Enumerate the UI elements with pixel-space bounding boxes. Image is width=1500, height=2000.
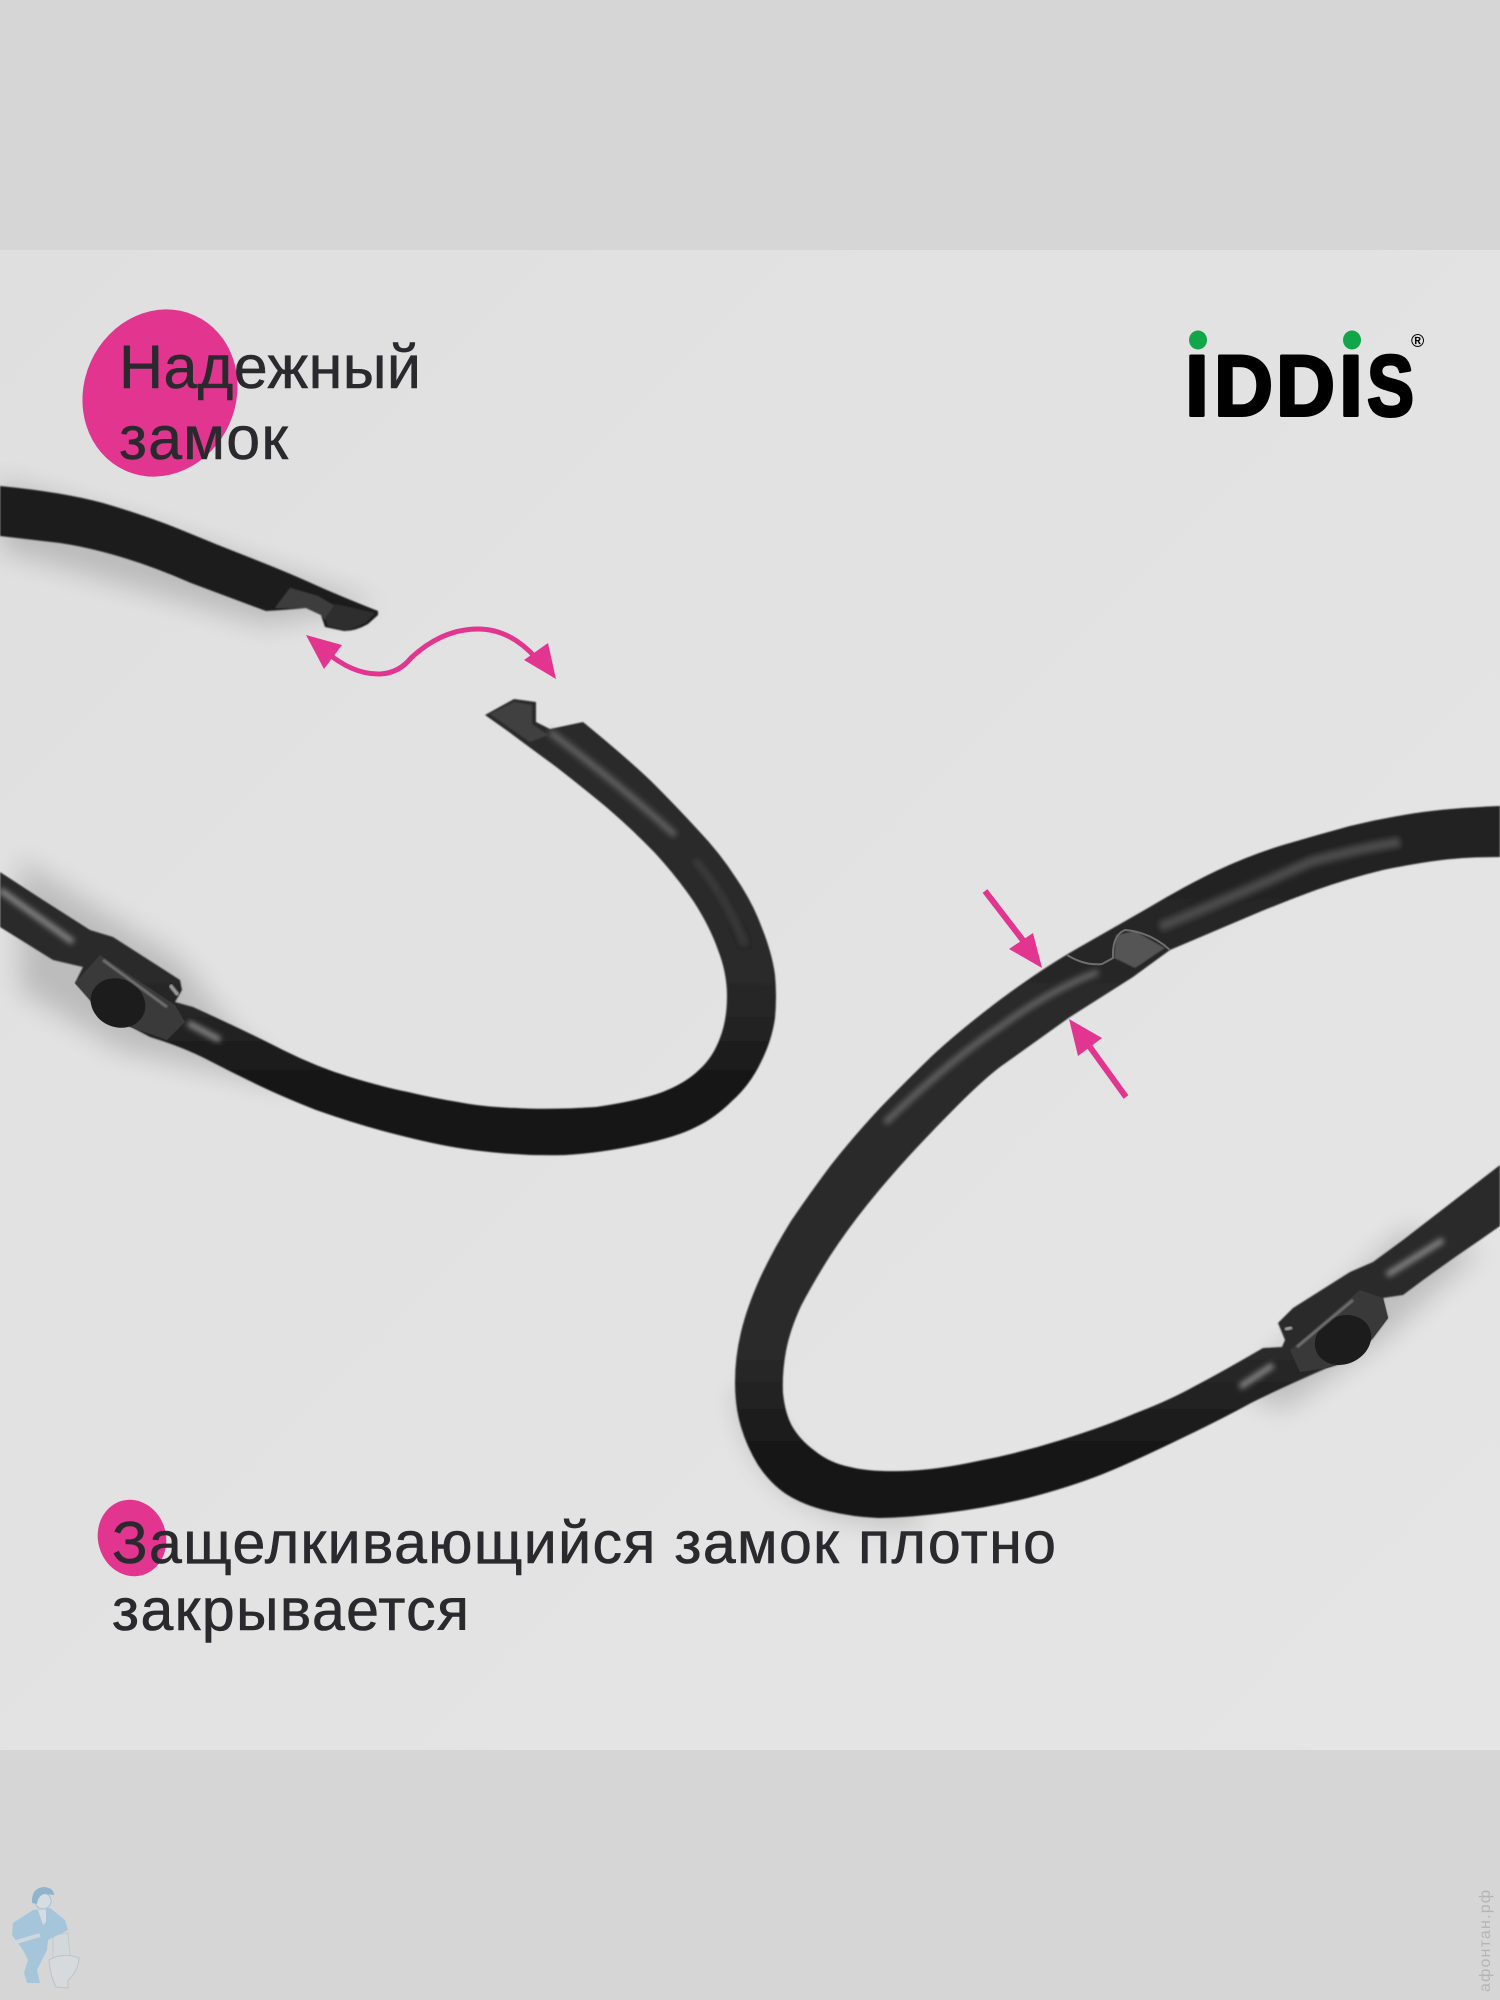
logo: IDDIS: I (1339, 338, 1363, 434)
ring shadows (0, 480, 1480, 1525)
arrow: double-headed curve between lock ends (306, 629, 556, 679)
clasp: open ring (0, 890, 220, 1040)
logo: IDDIS: ® (1411, 331, 1424, 351)
panel: product photo area (0, 250, 1500, 1750)
pink blob behind heading (56, 284, 264, 502)
caption (112, 1510, 1056, 1643)
heading: замок (119, 404, 288, 472)
caption: Защелкивающийся замок плотно (112, 1510, 1056, 1576)
open ring: upper end with lock notch (0, 486, 378, 631)
logo: IDDIS: D (1276, 338, 1335, 434)
pink blob behind caption (89, 1492, 175, 1584)
closed ring: lock joint (1067, 930, 1170, 968)
logo: IDDIS: I (1185, 338, 1209, 434)
logo: IDDIS (1185, 330, 1424, 434)
heading: Надежный (119, 333, 421, 401)
icon: plumber with toilet watermark (12, 1887, 79, 1988)
closed ring (735, 806, 1500, 1518)
logo: IDDIS: S (1367, 338, 1414, 434)
open ring: lower arc with clasp (0, 699, 776, 1155)
watermark text: афонтан.рф (1477, 1890, 1494, 1992)
background: top band (0, 0, 1500, 250)
logo: IDDIS: D (1214, 338, 1273, 434)
clasp: closed ring (1240, 1240, 1443, 1387)
arrow: upper compression arrow (985, 891, 1042, 968)
arrow: lower compression arrow (1069, 1019, 1126, 1097)
heading (119, 333, 421, 472)
caption: закрывается (112, 1577, 469, 1643)
background: bottom band (0, 1750, 1500, 2000)
